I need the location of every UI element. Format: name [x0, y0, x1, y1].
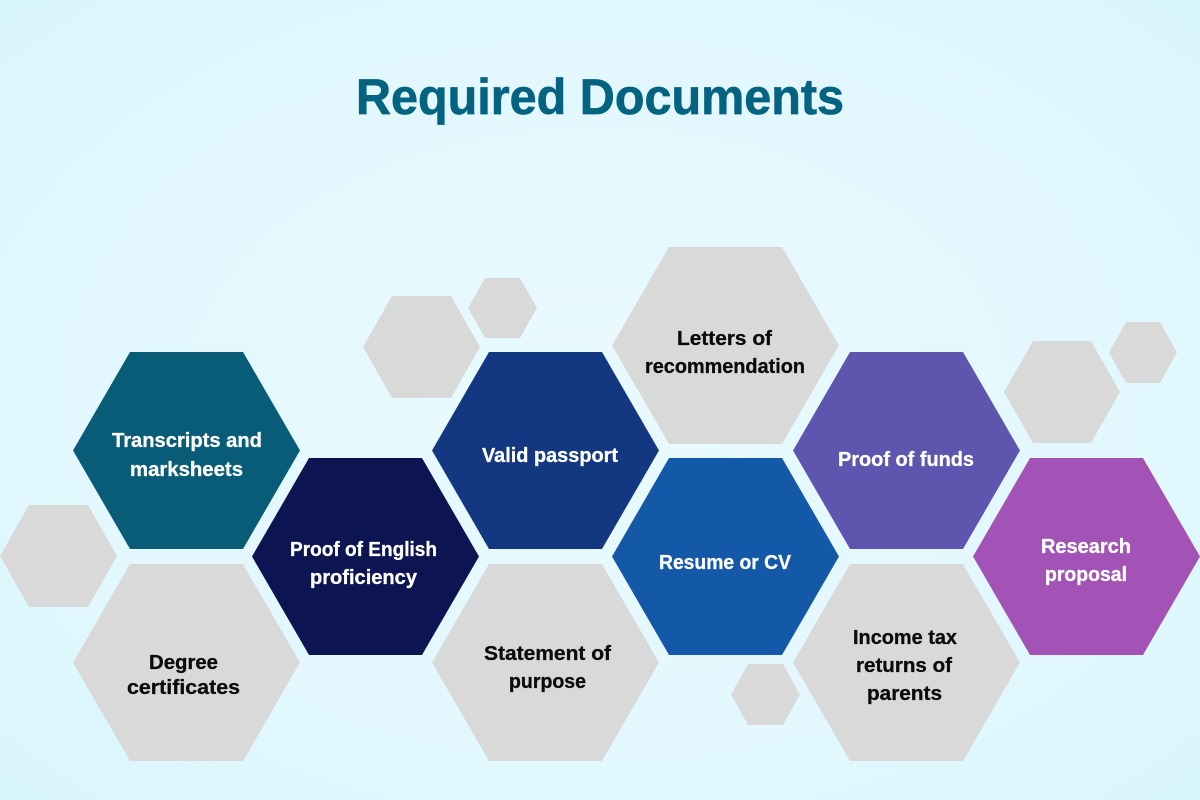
- hexagon: Degree certificates: Degree: [149, 651, 218, 674]
- hexagon: Proof of English proficiency: [252, 458, 479, 655]
- hexagon: Research proposal: [973, 458, 1200, 655]
- decorative grey hexagon: far left: [0, 505, 117, 607]
- hexagon: Transcripts and marksheets: Transcripts and: [112, 429, 262, 452]
- decorative grey hexagon: small, bottom middle: [731, 664, 800, 725]
- hexagon: Statement of purpose: [432, 564, 659, 761]
- hexagon: Resume or CV: Resume or CV: [659, 551, 791, 574]
- decorative grey hexagon: small, above passport: [468, 278, 537, 338]
- decorative grey hexagon: above English: [363, 296, 480, 398]
- hexagon: Letters of recommendation: [612, 247, 839, 444]
- hexagon: Resume or CV: [612, 458, 839, 655]
- hexagon: Degree certificates: [73, 564, 300, 761]
- title: Required Documents: [356, 69, 844, 125]
- hexagon: Income tax returns of parents: [793, 564, 1020, 761]
- hexagon: Proof of English proficiency: Proof of English: [290, 538, 437, 561]
- hexagon: Statement of purpose: purpose: [509, 670, 586, 693]
- hexagon: Income tax returns of parents: Income tax: [853, 626, 958, 649]
- hexagon: Letters of recommendation: Letters of: [677, 327, 772, 350]
- hexagon: Statement of purpose: Statement of: [484, 642, 611, 665]
- hexagon: Income tax returns of parents: returns of: [856, 654, 952, 677]
- hexagon: Income tax returns of parents: parents: [867, 682, 942, 705]
- hexagon: Research proposal: Research: [1041, 535, 1131, 558]
- hexagon: Transcripts and marksheets: [73, 352, 300, 549]
- hexagon: Letters of recommendation: recommendation: [645, 355, 805, 378]
- decorative grey hexagon: right: [1004, 341, 1120, 443]
- hexagon: Proof of English proficiency: proficiency: [310, 566, 418, 589]
- hexagon: Proof of funds: [793, 352, 1020, 549]
- decorative grey hexagon: small, top right: [1109, 322, 1177, 383]
- hexagon: Proof of funds: Proof of funds: [838, 448, 974, 471]
- hexagon: Research proposal: proposal: [1045, 563, 1127, 586]
- hexagon: Degree certificates: certificates: [127, 676, 240, 699]
- hexagon: Valid passport: [432, 352, 659, 549]
- hexagon: Valid passport: Valid passport: [482, 444, 618, 467]
- hexagon: Transcripts and marksheets: marksheets: [130, 458, 243, 481]
